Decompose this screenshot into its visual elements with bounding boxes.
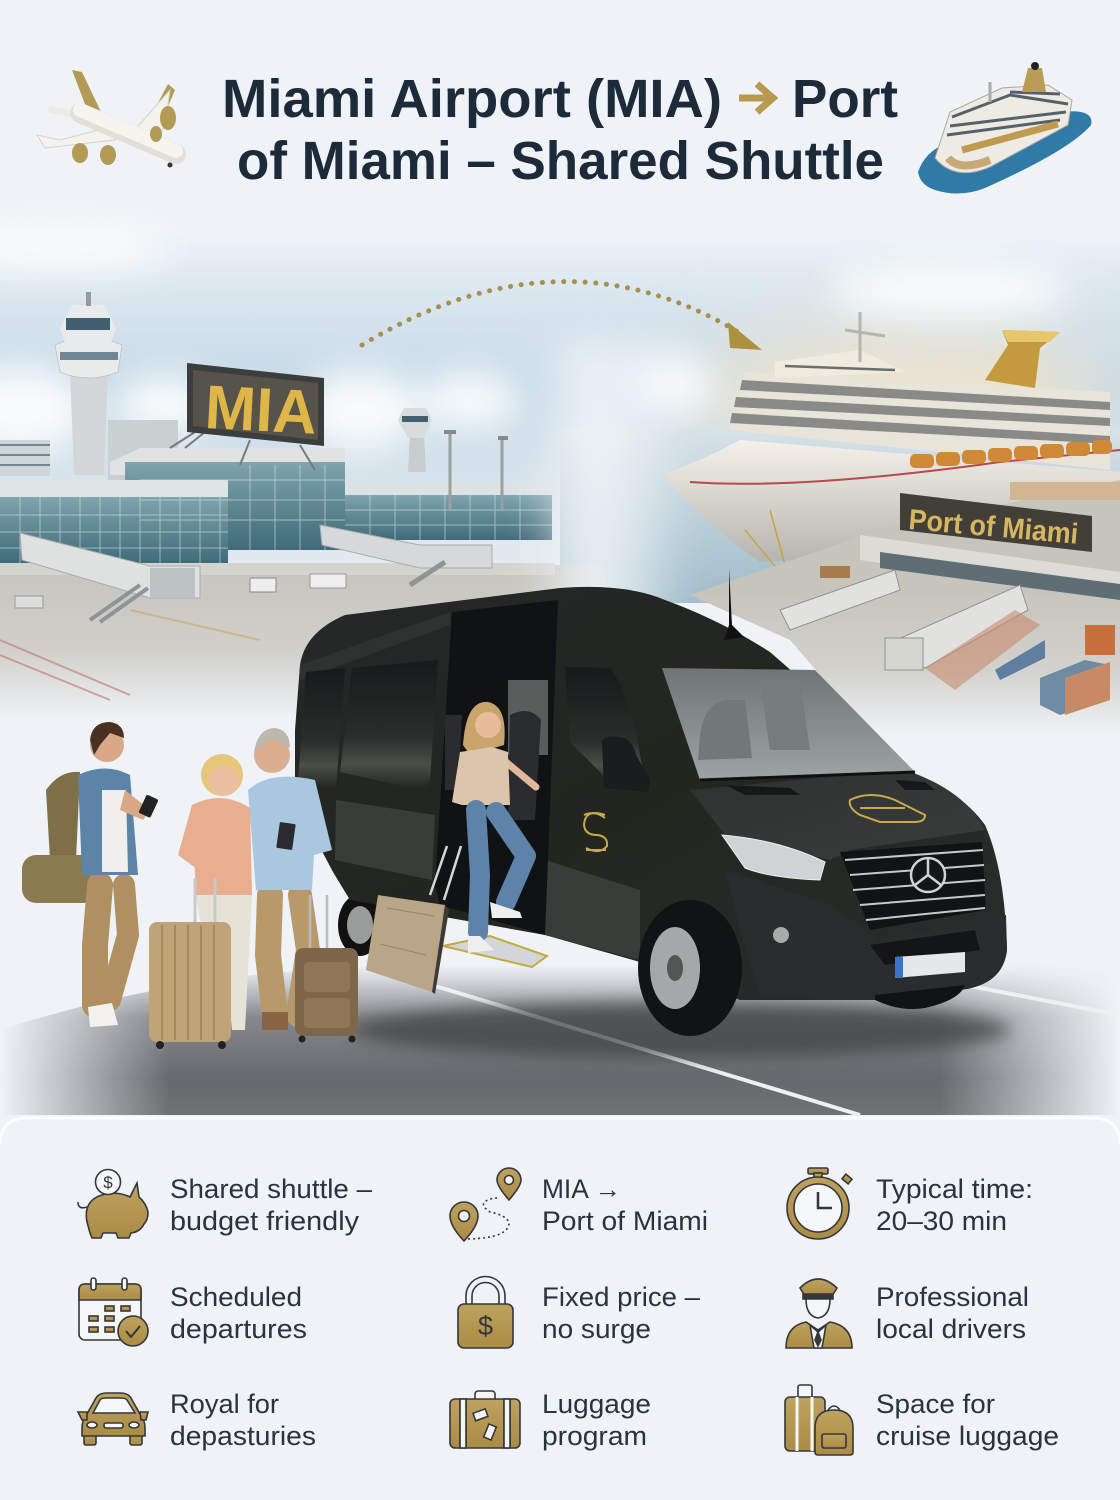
suitcase: gold hardshell: [149, 878, 231, 1049]
shuttle van: [295, 568, 1007, 1036]
person: young man: [22, 722, 159, 1027]
dotted route arrow: [362, 282, 762, 350]
airport tarmac: [0, 565, 620, 720]
text: route: [542, 1174, 708, 1236]
antenna: [724, 568, 744, 640]
text: scheduled: departures: [170, 1314, 307, 1344]
control tower: [55, 292, 122, 475]
jet bridges: airport: [15, 525, 492, 622]
van step: [443, 936, 547, 967]
icon: airplane: [37, 70, 176, 168]
van bumper: [725, 870, 1007, 1000]
van hood logo: [850, 795, 925, 822]
icon: stopwatch: [787, 1168, 852, 1239]
text: luggage: program: [542, 1421, 647, 1451]
text: fixed price: [542, 1282, 700, 1344]
text: professional: Professional: [876, 1282, 1029, 1312]
text: royal: Royal for: [170, 1389, 279, 1419]
text: luggage: [542, 1389, 651, 1451]
van mirror: [602, 737, 650, 792]
text: cruise luggage: cruise luggage: [876, 1421, 1059, 1451]
van headlight: [722, 835, 825, 880]
panel: features: [0, 1118, 1120, 1500]
center fade: [500, 340, 710, 630]
person: older woman: [178, 754, 252, 1030]
title: [222, 69, 898, 191]
person: woman boarding: [452, 702, 536, 953]
small tower: [398, 408, 508, 510]
van rear windows: [298, 660, 438, 790]
text: typical time: 20–30 min: [876, 1206, 1007, 1236]
van fog light: [773, 927, 980, 965]
van front wheel: [638, 900, 742, 1036]
text: fixed price: Fixed price –: [542, 1282, 700, 1312]
text: shared shuttle: [170, 1174, 372, 1236]
icon: driver: [786, 1279, 852, 1348]
van logo door: [584, 813, 607, 851]
icon: luggage and backpack: [785, 1385, 853, 1455]
sea: [560, 428, 1120, 603]
text: royal: depasturies: [170, 1421, 316, 1451]
van side sheen: [335, 800, 640, 960]
icon: cruise ship: [918, 62, 1091, 194]
text: cruise luggage: [876, 1389, 1059, 1451]
van windshield: [662, 668, 915, 780]
title: Miami Airport (MIA): [222, 69, 722, 129]
icon: car: [78, 1393, 148, 1445]
text: typical time: [876, 1174, 1033, 1236]
text: shared shuttle: Shared shuttle –: [170, 1174, 372, 1204]
icon: piggy bank: [78, 1170, 148, 1238]
person: older man: [248, 728, 332, 1030]
MIA sign: MIA: [203, 373, 319, 448]
icon: padlock: $: [478, 1311, 493, 1341]
road: [0, 950, 1120, 1115]
text: professional: [876, 1282, 1029, 1344]
text: cruise luggage: Space for: [876, 1389, 995, 1419]
text: route: Port of Miami: [542, 1206, 708, 1236]
sun haze: [690, 330, 1110, 470]
van hood: [690, 770, 985, 860]
icon: route pins: [450, 1168, 521, 1241]
text: scheduled: Scheduled: [170, 1282, 302, 1312]
text: shared shuttle: budget friendly: [170, 1206, 360, 1236]
text: fixed price: no surge: [542, 1314, 651, 1344]
license plate: [895, 952, 965, 978]
suitcase: tan rolling: [366, 846, 461, 994]
MIA sign: [170, 363, 324, 470]
icon: padlock: [458, 1276, 513, 1348]
text: route: MIA →: [542, 1174, 621, 1204]
scene: hero illustration: [0, 230, 1120, 1115]
text: typical time: Typical time:: [876, 1174, 1033, 1204]
van rear wheel: [338, 894, 382, 956]
van door opening: [435, 600, 558, 935]
sky: [0, 230, 1120, 600]
van far wheel: [875, 985, 965, 1009]
van body: [295, 587, 1007, 1000]
van hood vents: [725, 780, 935, 795]
text: professional: local drivers: [876, 1314, 1026, 1344]
text: luggage: Luggage: [542, 1389, 651, 1419]
text: royal: [170, 1389, 316, 1451]
title: of Miami – Shared Shuttle: [237, 131, 884, 191]
icon: calendar: [79, 1278, 148, 1346]
clouds: [0, 230, 1070, 455]
cruise ship: large: [663, 312, 1120, 570]
text: scheduled: [170, 1282, 307, 1344]
van grille: [840, 842, 986, 930]
icon: piggy bank: $: [103, 1173, 113, 1192]
icon: suitcase: [450, 1391, 520, 1448]
port pier: [690, 480, 1120, 745]
suitcase: brown rolling: [295, 895, 358, 1042]
Port of Miami sign: Port of Miami: [907, 504, 1080, 551]
airport terminal: [0, 420, 555, 575]
title: Port: [792, 69, 898, 129]
arrow: title gold arrow: [739, 84, 773, 112]
van front side window: [565, 667, 645, 790]
